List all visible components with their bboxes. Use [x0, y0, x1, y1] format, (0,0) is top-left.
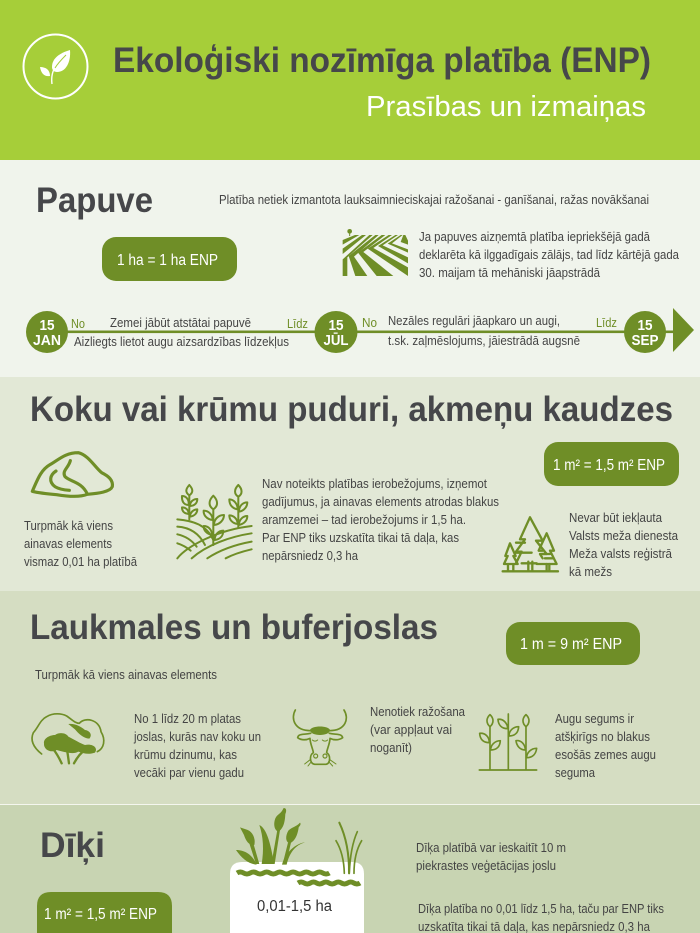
panel: Dīķi: [0, 805, 700, 933]
icon: ploughed field: [343, 229, 408, 276]
text: stone pile note: Turpmāk kā viens: [24, 519, 113, 533]
text: forest note: kā mežs: [569, 565, 612, 579]
text: pond size limits: Dīķa platība no 0,01 līdz 1,5 ha, taču par ENP tiks: [418, 902, 664, 916]
panel: Papuve: [0, 160, 700, 377]
badge: 1 ha = 1 ha ENP: [102, 237, 237, 281]
panel: Laukmales un buferjoslas: [0, 591, 700, 804]
text: size limits: Nav noteikts platības ierobežojums, izņemot: [262, 477, 487, 491]
text: plant cover: esošās zemes augu: [555, 748, 656, 762]
text: size limits: Par ENP tiks uzskatīta tikai tā daļa, kas: [262, 531, 459, 545]
text: forest note: Meža valsts reģistrā: [569, 547, 672, 561]
text: fallow note: Ja papuves aizņemtā platība iepriekšējā gadā: [419, 230, 650, 244]
date: 15 SEP: SEP: [632, 333, 659, 349]
text: riparian vegetation: piekrastes veģetācijas joslu: [416, 859, 556, 873]
text: strip width: krūmu dzinumu, kas: [134, 748, 237, 762]
arrow head: [673, 308, 694, 352]
timeline labels, second period: Nezāles regulāri jāapkaro un augi,: [388, 314, 560, 328]
label: pond area: 0,01-1,5 ha: [257, 898, 332, 915]
icon: forest: [503, 517, 558, 571]
date: 15 JAN: 15: [40, 318, 54, 334]
icon: plants: [479, 714, 537, 770]
badge: 1 m2 = 1,5 m2 ENP: 1 m² = 1,5 m² ENP: [553, 457, 665, 474]
date: 15 SEP: 15: [638, 318, 652, 334]
badge: 1 m = 9 m2 ENP: [506, 622, 640, 665]
text: riparian vegetation: Dīķa platībā var ieskaitīt 10 m: [416, 841, 566, 855]
timeline labels, second period: [362, 314, 617, 348]
icon: reeds: [336, 823, 362, 873]
text: fallow note: [419, 230, 679, 280]
text: size limits: [262, 477, 499, 563]
icon: crops on hills: [177, 485, 252, 558]
icon: leaf in circle: [24, 34, 88, 98]
badge: 1 m2 = 1,5 m2 ENP: 1 m² = 1,5 m² ENP: [44, 906, 157, 923]
text: no production: noganīt): [370, 741, 412, 755]
text: forest note: [569, 511, 678, 579]
text: size limits: nepārsniedz 0,3 ha: [262, 549, 358, 563]
text: stone pile note: vismaz 0,01 ha platībā: [24, 555, 137, 569]
title: Ekoloģiski nozīmīga platība (ENP): [113, 41, 651, 80]
text: landscape element note: Turpmāk kā viens ainavas elements: [35, 668, 217, 682]
heading: Laukmales un buferjoslas: [30, 608, 438, 647]
text: no production: Nenotiek ražošana: [370, 705, 465, 719]
timeline labels, first period: Zemei jābūt atstātai papuvē: [110, 316, 251, 330]
timeline labels, second period: t.sk. zaļmēslojums, jāiestrādā augsnē: [388, 334, 580, 348]
badge: 1 m2 = 1,5 m2 ENP: [544, 442, 679, 486]
badge: 1 m = 9 m2 ENP: 1 m = 9 m² ENP: [520, 636, 622, 653]
icon: cattails: [236, 808, 305, 865]
date: 15 JUL: [314, 311, 358, 353]
date: 15 JAN: JAN: [33, 333, 61, 349]
heading: Papuve: Papuve: [36, 181, 153, 220]
text: strip width: [133, 712, 261, 780]
text: strip width: vecāki par vienu gadu: [134, 766, 244, 780]
timeline labels, second period: No: [362, 316, 377, 330]
text: fallow note: deklarēta kā ilggadīgais zālājs, tad līdz kārtējā gada: [419, 248, 679, 262]
date: 15 SEP: [624, 311, 666, 353]
text: plant cover: [555, 712, 656, 780]
text: strip width: No 1 līdz 20 m platas: [134, 712, 241, 726]
text: fallow note: 30. maijam tā mehāniski jāapstrādā: [419, 266, 600, 280]
text: strip width: joslas, kurās nav koku un: [133, 730, 261, 744]
text: usage description: Platība netiek izmantota lauksaimnieciskajai ražošanai - ganīšanai, ražas novākšanai: [219, 193, 649, 207]
badge: 1 ha = 1 ha ENP: 1 ha = 1 ha ENP: [117, 252, 218, 269]
icon: cow: [293, 710, 346, 766]
text: plant cover: Augu segums ir: [555, 712, 634, 726]
timeline labels, first period: No: [71, 317, 85, 331]
text: size limits: aramzemei – tad ierobežojums ir 1,5 ha.: [262, 513, 466, 527]
timeline: [26, 308, 694, 353]
text: stone pile note: [24, 519, 137, 569]
text: plant cover: seguma: [555, 766, 595, 780]
date: 15 JUL: JŪL: [324, 332, 349, 349]
text: size limits: gadījumus, ja ainavas elements atrodas blakus: [262, 495, 499, 509]
icon: water waves: [237, 872, 360, 884]
panel: header: [0, 0, 700, 160]
text: forest note: Valsts meža dienesta: [569, 529, 678, 543]
icon: stone pile: [32, 453, 112, 496]
illustration: pond: [230, 808, 364, 933]
text: plant cover: atšķirīgs no blakus: [555, 730, 650, 744]
subtitle: Prasības un izmaiņas: [366, 91, 646, 123]
heading: Koku vai krūmu puduri, akmeņu kaudzes: [30, 390, 673, 429]
timeline labels, first period: Aizliegts lietot augu aizsardzības līdzekļus: [74, 335, 289, 349]
panel: Koku vai krūmu puduri: [0, 377, 700, 591]
text: no production: (var appļaut vai: [370, 723, 452, 737]
badge: 1 m2 = 1,5 m2 ENP: [37, 892, 172, 933]
text: pond size limits: [418, 902, 664, 933]
text: no production: [370, 705, 465, 755]
text: riparian vegetation: [416, 841, 566, 873]
timeline labels, first period: Līdz: [287, 317, 308, 331]
date: 15 JAN: [26, 311, 68, 353]
date: 15 JUL: 15: [328, 318, 344, 334]
timeline labels, first period: [71, 316, 308, 349]
timeline labels, second period: Līdz: [596, 316, 617, 330]
text: stone pile note: ainavas elements: [24, 537, 112, 551]
text: forest note: Nevar būt iekļauta: [569, 511, 662, 525]
icon: bush: [32, 714, 104, 763]
heading: Dīķi: [40, 826, 105, 865]
